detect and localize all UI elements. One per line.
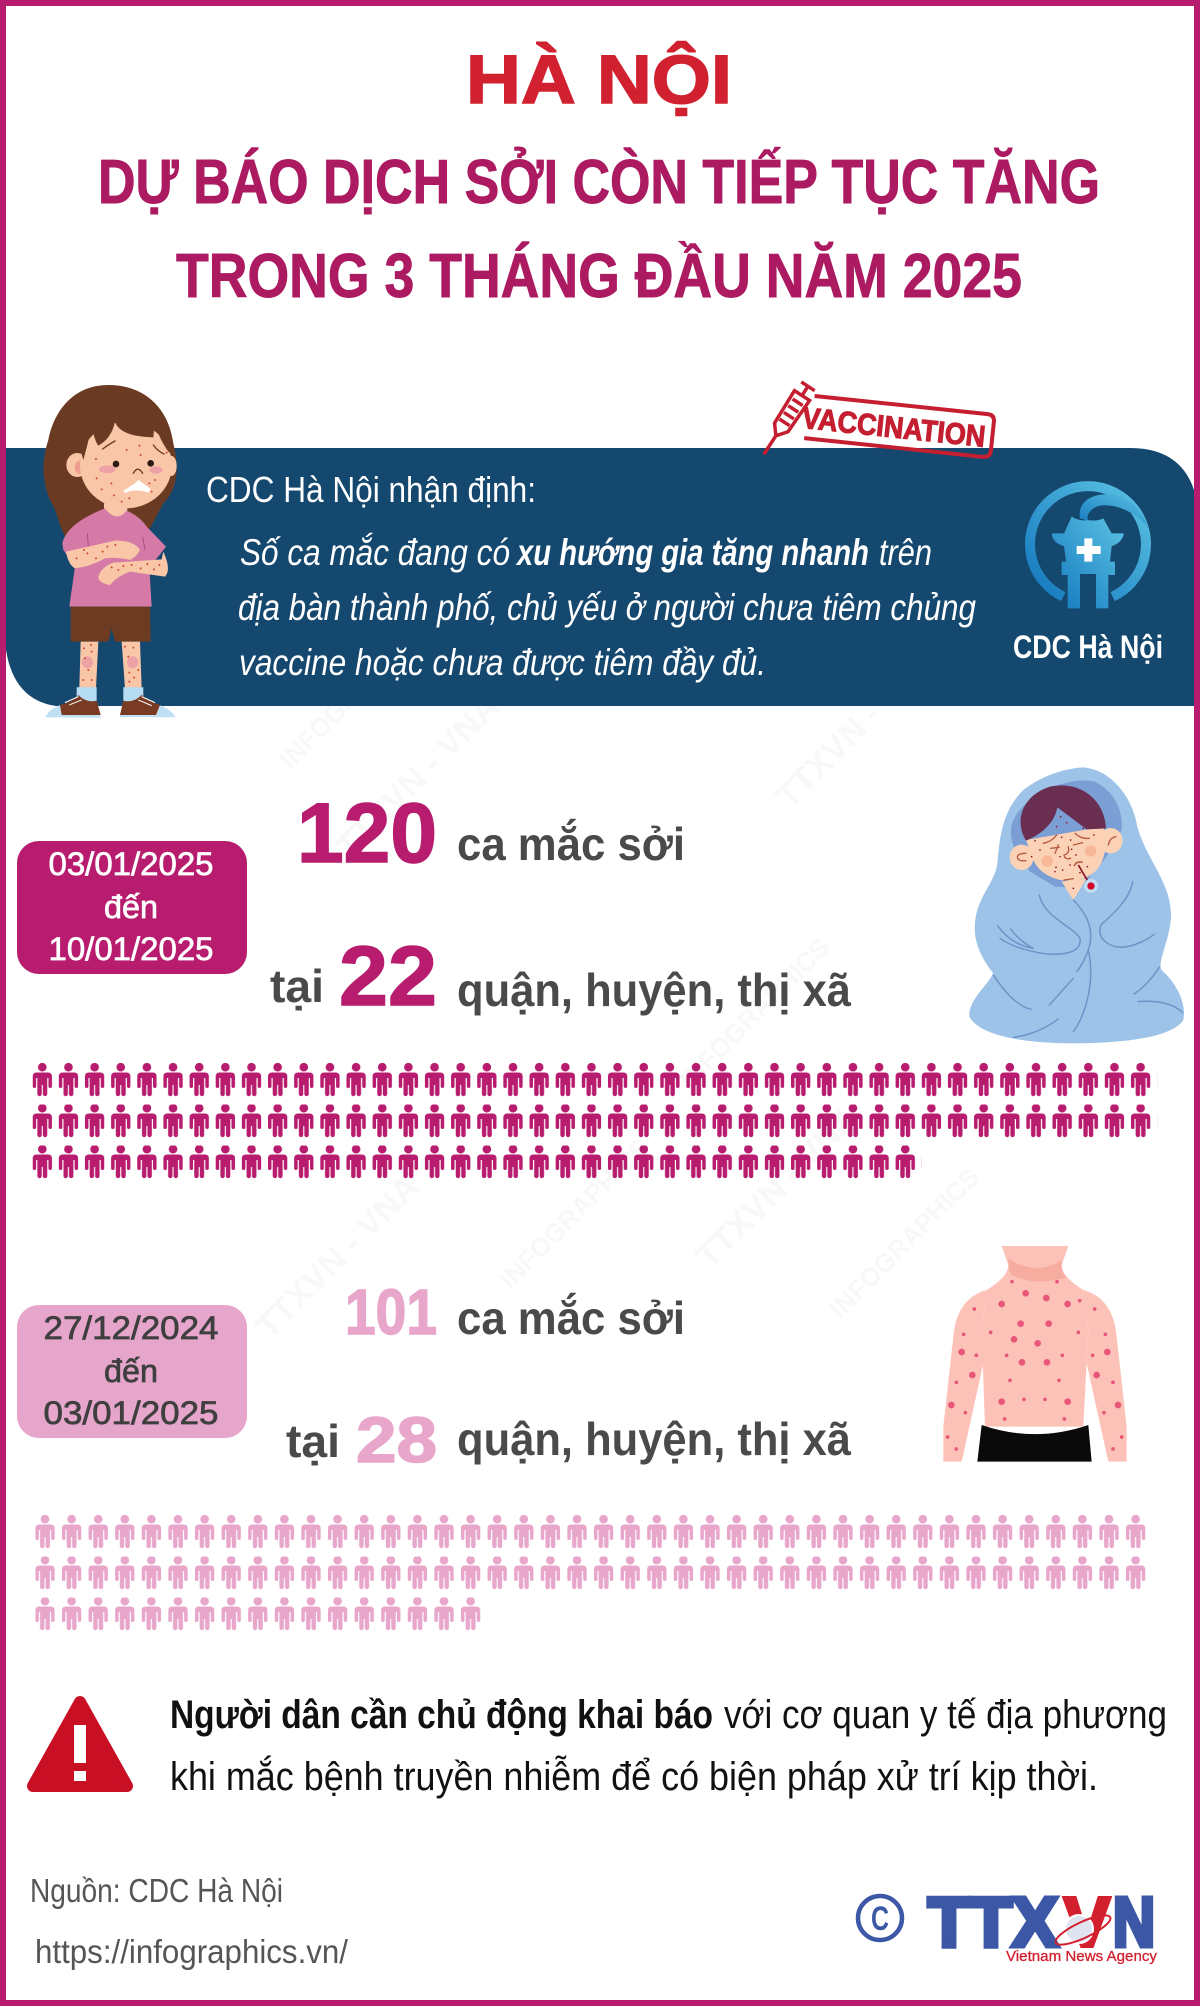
advice text: [170, 1693, 1167, 1799]
stat: 22 districts: [270, 929, 851, 1023]
logo: TTXVN: V: [1064, 1883, 1110, 1961]
icon: sick child in blanket: [969, 767, 1184, 1043]
icon: copyright: [858, 1896, 902, 1940]
date badge: 27/12/2024: [44, 1310, 218, 1346]
banner quote: Số ca mắc đang có: [240, 532, 510, 573]
banner quote: trên: [879, 532, 932, 573]
stat: 101 cases: ca mắc sởi: [457, 1292, 685, 1344]
icon: warning triangle: [33, 1702, 127, 1786]
stat: 28 districts: [286, 1404, 851, 1476]
icon: vaccination stamp: VACCINATION: [800, 402, 987, 454]
logo caption: CDC Hà Nội: [1013, 629, 1163, 665]
date badge: 03/01/2025: [48, 846, 214, 882]
banner quote: địa bàn thành phố, chủ yếu ở người chưa tiêm chủng: [238, 587, 976, 628]
stat: 120 cases: ca mắc sởi: [457, 818, 685, 870]
banner quote: xu hướng gia tăng nhanh: [515, 532, 869, 573]
logo: TTXVN: Vietnam News Agency: [1006, 1948, 1157, 1965]
stat: 28 districts: tại: [286, 1415, 340, 1467]
title: [98, 41, 1100, 311]
text: TTXVN - VNA: [329, 688, 507, 866]
icon: copyright: C: [871, 1900, 889, 1938]
title: TRONG 3 THÁNG ĐẦU NĂM 2025: [176, 242, 1022, 311]
source: Nguồn: CDC Hà Nội: [30, 1872, 283, 1909]
date badge: [17, 841, 247, 974]
title: HÀ NỘI: [466, 41, 732, 118]
text: INFOGRAPHICS: [673, 932, 835, 1094]
date badge: đến: [104, 889, 158, 925]
date badge: [17, 1305, 247, 1438]
stat: 22 districts: tại: [270, 960, 324, 1012]
stat: 120 cases: 120: [297, 786, 437, 880]
panel: week 03/01–10/01/2025: [17, 786, 1157, 1179]
banner quote: vaccine hoặc chưa được tiêm đầy đủ.: [239, 642, 766, 683]
logo: TTXVN: N: [1113, 1883, 1155, 1961]
icon: CDC Hà Nội logo: [1030, 486, 1148, 608]
logo: TTXVN: TTX: [928, 1883, 1058, 1961]
panel: CDC assessment banner: [6, 448, 1194, 706]
icon: vaccination stamp: [756, 381, 995, 459]
text: TTXVN - VNA: [689, 1098, 867, 1276]
date badge: 10/01/2025: [48, 931, 214, 967]
url: https://infographics.vn/: [35, 1933, 349, 1970]
stat: 101 cases: 101: [345, 1276, 437, 1348]
pictogram: 101 people: [35, 1515, 1153, 1631]
advice text: Người dân cần chủ động khai báo: [170, 1693, 713, 1737]
stat: 120 cases: [297, 786, 685, 880]
pictogram: 120 people: [33, 1063, 1157, 1179]
advice text: khi mắc bệnh truyền nhiễm để có biện pháp xử trí kịp thời.: [170, 1754, 1098, 1799]
text: INFOGRAPHICS: [493, 1132, 655, 1294]
callout: public advice: [33, 1693, 1167, 1799]
logo: TTXVN: [928, 1883, 1157, 1965]
text: INFOGRAPHICS: [823, 1162, 985, 1324]
stat: 22 districts: 22: [339, 929, 437, 1023]
stat: 28 districts: quận, huyện, thị xã: [457, 1413, 851, 1465]
stat: 28 districts: 28: [356, 1404, 437, 1476]
stat: 101 cases: [345, 1276, 685, 1348]
stat: 22 districts: quận, huyện, thị xã: [457, 964, 851, 1016]
banner quote: [238, 532, 976, 683]
panel: week 27/12/2024–03/01/2025: [17, 1276, 1153, 1631]
banner heading: CDC Hà Nội nhận định:: [206, 469, 536, 510]
text: INFOGRAPHICS: [273, 612, 435, 774]
date badge: 03/01/2025: [44, 1395, 218, 1431]
icon: torso with rash: [943, 1246, 1127, 1462]
text: TTXVN - VNA: [249, 1168, 427, 1346]
date badge: đến: [104, 1353, 158, 1389]
text: TTXVN - VNA: [769, 638, 947, 816]
icon: girl with measles rash: [44, 385, 177, 718]
